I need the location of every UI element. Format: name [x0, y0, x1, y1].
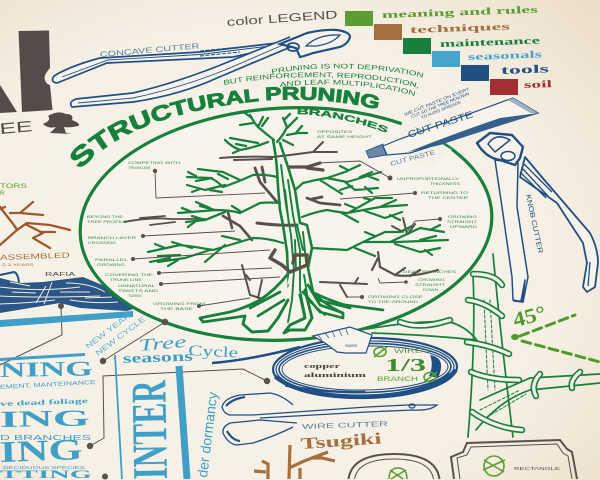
diagnostic labels: RETURNING TO: [421, 190, 468, 195]
connector: cycle: [100, 319, 168, 364]
blue rule: [0, 353, 85, 361]
pruning statement: PRUNING IS NOT DEPRIVATION: [272, 64, 424, 78]
seasonal pruning list: NING: [0, 356, 93, 382]
tree cycle seasons title: Cycle: [188, 343, 239, 362]
diagnostic labels: STRAIGHT: [415, 282, 446, 287]
roots: [200, 275, 288, 332]
wire tag: [313, 327, 372, 353]
pruning statement: AND LEAF MULTIPLICATION: [280, 80, 416, 96]
wire coils: [400, 274, 580, 430]
color legend: [226, 5, 553, 95]
legend heading: color LEGEND: [226, 9, 338, 29]
diagnostic labels: PARALLEL: [95, 257, 129, 262]
pruning statement: BUT REINFORCEMENT, REPRODUCTION,: [224, 72, 418, 89]
diagnostic labels: TO THE GROUND: [368, 299, 418, 304]
rafia grafting branch: [0, 272, 133, 365]
diagnostic labels: UNNATURAL: [118, 283, 156, 288]
tube note: [404, 86, 471, 120]
aluminium wire coil: SWIRE: [345, 344, 358, 348]
leader dots: [131, 169, 442, 308]
leader: [0, 306, 62, 365]
diagnostic labels: BEYOND THE: [87, 214, 123, 219]
subheading: branches: BRANCHES: [298, 109, 388, 132]
diagnostic labels: DEAD BRANCHES: [403, 269, 457, 274]
diagnostic labels: STRAIGHT: [447, 219, 478, 224]
seasonal pruning list: ING: [0, 405, 90, 432]
new year new cycle: NEW CYCLE: [94, 314, 147, 358]
seasonal pruning list: [0, 356, 96, 480]
legend labels: maintenance: [440, 35, 541, 50]
legend swatches: [345, 11, 518, 95]
green scaffold branches: [148, 165, 448, 266]
new year new cycle: [84, 310, 147, 358]
seasonal pruning list: EMENT, MANTEINANCE: [0, 380, 96, 391]
green caption: TORS: [0, 183, 28, 190]
diagnostic labels: OPPOSITES: [317, 129, 352, 134]
winter season: [120, 379, 220, 480]
rafia label: RAFIA: [45, 272, 76, 278]
trunk lines: [367, 254, 600, 437]
gap in circle behind tube: [393, 120, 452, 170]
dead and defective branches: [124, 142, 438, 298]
diagnostic labels: THE BASE: [160, 306, 194, 311]
tree cycle seasons title: Tree: [138, 332, 188, 355]
tsugiki grafting: [254, 430, 383, 479]
diagnostic labels: THE CENTER: [428, 195, 468, 200]
tube note: WE CUT PASTE ON EVERY: [404, 86, 471, 117]
wiring diagram: [367, 254, 600, 437]
aluminium wire coil: [212, 327, 458, 400]
left column: assembled tree: 2-3 YEARS: [2, 263, 35, 267]
assembled caption: ASSEMBLED: [0, 251, 71, 262]
wire ratio: WIRE =: [394, 349, 432, 355]
diagnostic labels: GROWING: [418, 277, 445, 282]
grafted tree drawing: [254, 445, 335, 479]
pot shape: rectangle: [451, 440, 577, 479]
rectangle label: RECTANGLE: [514, 466, 560, 472]
tree cycle seasons title: seasons: [123, 350, 194, 367]
seasons rules: [115, 355, 187, 479]
connector: wire: [87, 369, 270, 480]
pot shape: oval: [348, 454, 440, 479]
diagnostic labels: DOWN: [423, 287, 438, 292]
legend labels: seasonals: [468, 49, 542, 63]
diagnostic labels: COVERING THE: [105, 272, 154, 277]
legend labels: tools: [501, 63, 550, 77]
heading: structural pruning: STRUCTURAL PRUNING: [70, 86, 380, 167]
tube note: TO AVOID SPREADS: [421, 99, 462, 120]
diagnostic labels: TWISTS AND: [118, 288, 158, 293]
diagnostic labels: GROWING: [97, 262, 125, 267]
wire cutter label: WIRE CUTTER: [302, 421, 388, 431]
cut paste tube: [366, 86, 538, 170]
knob cutter label: KNOB CUTTER: [524, 194, 543, 254]
new year new cycle: NEW YEAR: [84, 310, 133, 351]
diagnostic labels: UNPROPORTIONALLY: [397, 176, 459, 181]
wire cutter tool: [222, 393, 437, 445]
diagnostic labels: CROSSING: [88, 240, 116, 245]
tool label: CUT PASTE: [390, 149, 437, 168]
winter season: INTER: [120, 379, 178, 480]
left column: assembled tree: R: [0, 190, 5, 197]
seasons blue band: [0, 311, 133, 327]
aluminium wire coil: aluminium: [304, 372, 367, 379]
trunk: [200, 140, 383, 333]
diagnostic labels: GROWING FROM: [153, 301, 205, 306]
label: concave cutter: CONCAVE CUTTER: [99, 41, 201, 59]
legend labels: [382, 5, 553, 91]
left column: assembled tree: [0, 183, 71, 267]
tube note: CUT SO THE TREE RENOWN: [411, 91, 470, 119]
diagnostic labels: UPWARD: [450, 224, 477, 229]
diagnostic labels: THICKNESS: [430, 181, 460, 186]
title logo block: [0, 30, 79, 138]
diagnostic labels: TRUNK LINE: [110, 277, 142, 282]
diagnostic labels: TREE PROFILE: [87, 219, 127, 224]
knob cutter tool: [477, 133, 598, 302]
diagnostic labels: [87, 129, 478, 311]
seasonal pruning list: DECIDUOUS SPECIES: [3, 465, 85, 471]
diagnostic labels: AT SAME HEIGHT: [317, 134, 373, 139]
diagnostic labels: TRUNKLINE: [128, 165, 151, 170]
tsugiki heading: Tsugiki: [300, 430, 383, 453]
seasonal pruning list: ING: [0, 433, 83, 469]
angle label: 45°: [510, 301, 548, 332]
diagnostic labels: TURNS: [128, 293, 142, 298]
diagnostic labels: COMPETING WITH: [128, 160, 180, 165]
wire ratio: [374, 347, 437, 383]
wire ratio: 1/3: [385, 355, 426, 375]
diagnostic labels: BRANCH LAYER: [88, 235, 136, 240]
pruning statement: [182, 40, 464, 136]
trunk knots: [270, 250, 307, 272]
leader lines: [133, 161, 440, 306]
seasonal pruning list: ve dead foliage: [0, 397, 88, 408]
angle indicator: [510, 301, 600, 362]
diagnostic labels: GROWING CLOSE: [368, 294, 424, 299]
brown tree sketch: [0, 202, 70, 248]
wire types: copper: [304, 363, 340, 370]
diagnostic labels: GROWING: [448, 214, 477, 219]
tree cycle seasons title: [123, 332, 239, 367]
legend labels: soil: [524, 79, 553, 91]
legend labels: techniques: [410, 22, 510, 36]
bonsai tree: [124, 113, 448, 333]
structural pruning circle: [74, 97, 498, 351]
green crown: [225, 113, 307, 153]
wire ratio: BRANCH: [377, 377, 418, 383]
tube label: CUT PASTE: [407, 109, 475, 141]
concave cutter tool: [53, 30, 350, 107]
seasonal pruning list: D BRANCHES: [0, 433, 91, 442]
legend labels: meaning and rules: [382, 5, 538, 21]
winter note: der dormancy: [194, 391, 220, 478]
